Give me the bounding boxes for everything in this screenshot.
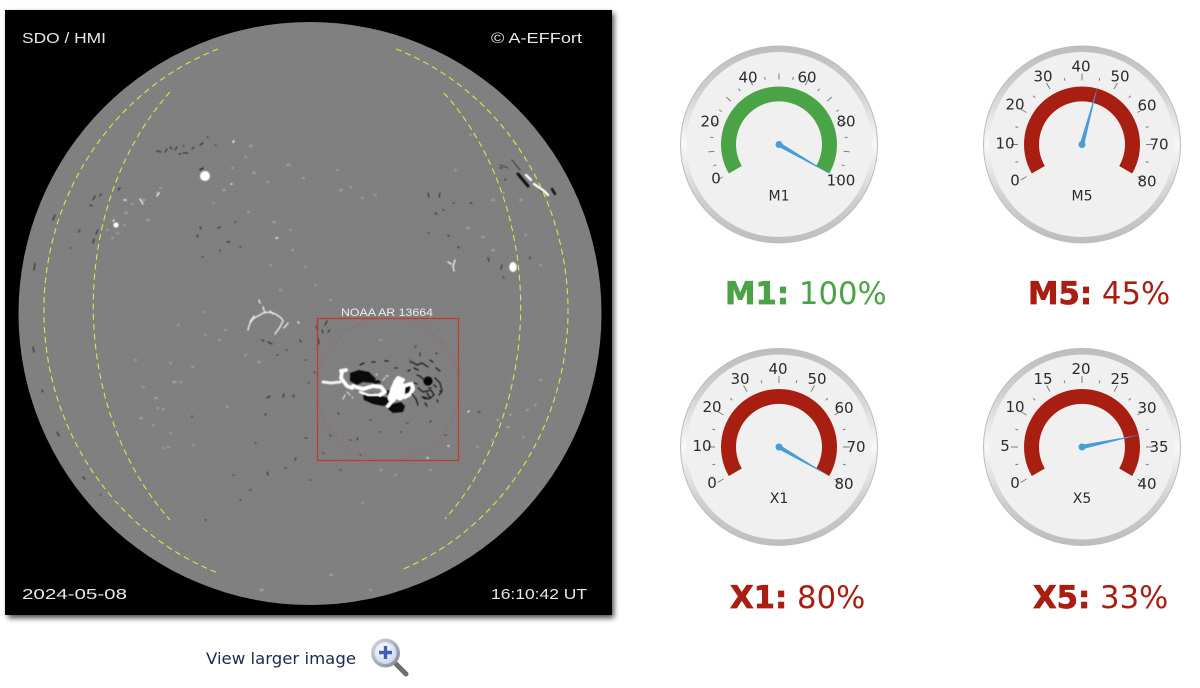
- gauge band: [721, 86, 837, 174]
- scale labels: 60: [1137, 96, 1157, 114]
- scale labels: [995, 58, 1169, 190]
- link: view larger image: View larger image: [206, 649, 356, 668]
- magnetic field features: [33, 135, 555, 590]
- scale labels: 40: [1137, 475, 1157, 493]
- solar disc: [18, 22, 602, 605]
- scale labels: 60: [797, 68, 817, 86]
- probability: X1: X1: 80%: [730, 581, 865, 616]
- needle: [776, 141, 833, 177]
- gauge name: X5: [1073, 491, 1091, 507]
- scale labels: 50: [1110, 68, 1130, 86]
- caption: time: 16:10:42 UT: [491, 586, 587, 603]
- gauge: M5: [984, 46, 1180, 243]
- scale labels: 50: [807, 370, 827, 388]
- scale labels: 25: [1110, 370, 1130, 388]
- scale labels: 0: [1010, 474, 1020, 492]
- scale labels: 40: [1071, 58, 1091, 76]
- scale labels: 35: [1149, 438, 1169, 456]
- scale labels: [1000, 360, 1169, 493]
- scale labels: 15: [1033, 370, 1053, 388]
- gauge: M1: [680, 46, 878, 243]
- probability: X5: X5: 33%: [1033, 581, 1168, 616]
- scale labels: 30: [1033, 68, 1053, 86]
- scale labels: 20: [1071, 360, 1091, 378]
- scale labels: 60: [834, 399, 854, 417]
- scale labels: 100: [827, 172, 855, 190]
- scale labels: 20: [1005, 96, 1025, 114]
- scale labels: 10: [1005, 398, 1025, 416]
- polarity patches: sunspot group: [113, 160, 555, 413]
- caption: date: 2024-05-08: [22, 586, 127, 603]
- caption: copyright: © A-EFFort: [491, 30, 583, 47]
- scale labels: 10: [995, 134, 1015, 152]
- scale labels: 10: [692, 437, 712, 455]
- scale labels: [692, 360, 866, 493]
- gauge band: [1024, 86, 1140, 174]
- gauge band: [721, 389, 837, 476]
- scale labels: 40: [768, 360, 788, 378]
- panel: solar magnetogram: [5, 10, 614, 618]
- scale labels: [700, 68, 856, 190]
- caption: instrument: SDO / HMI: [22, 30, 106, 47]
- scale labels: 0: [711, 170, 721, 188]
- scale labels: 80: [834, 475, 854, 493]
- scale labels: 0: [707, 474, 717, 492]
- probability: M5: M5: 45%: [1028, 277, 1170, 312]
- icon: magnifier: [371, 638, 406, 674]
- gauge name: M1: [768, 188, 790, 204]
- scale labels: 0: [1010, 172, 1020, 190]
- scale labels: 20: [702, 398, 722, 416]
- scale labels: 40: [738, 68, 758, 86]
- region box: NOAA AR 13664: NOAA AR 13664: [341, 307, 433, 319]
- scale labels: 30: [730, 370, 750, 388]
- gauge name: X1: [770, 491, 788, 507]
- needle: [776, 444, 833, 479]
- gauge name: M5: [1072, 188, 1092, 204]
- scale labels: 80: [836, 112, 856, 130]
- scale labels: 20: [700, 112, 720, 130]
- needle: [1078, 432, 1142, 450]
- gauge: X1: [680, 348, 878, 546]
- gauge: X5: [984, 348, 1180, 546]
- scale labels: 30: [1137, 399, 1157, 417]
- needle: [1078, 84, 1100, 148]
- longitude lines: yellow dashed arcs: [44, 49, 568, 573]
- scale labels: 80: [1137, 172, 1157, 190]
- scale labels: 5: [1000, 437, 1010, 455]
- probability: M1: M1: 100%: [725, 277, 887, 312]
- gauge band: [1024, 389, 1140, 476]
- scale labels: 70: [846, 438, 866, 456]
- scale labels: 70: [1149, 136, 1169, 154]
- region box: NOAA AR 13664: [317, 307, 459, 460]
